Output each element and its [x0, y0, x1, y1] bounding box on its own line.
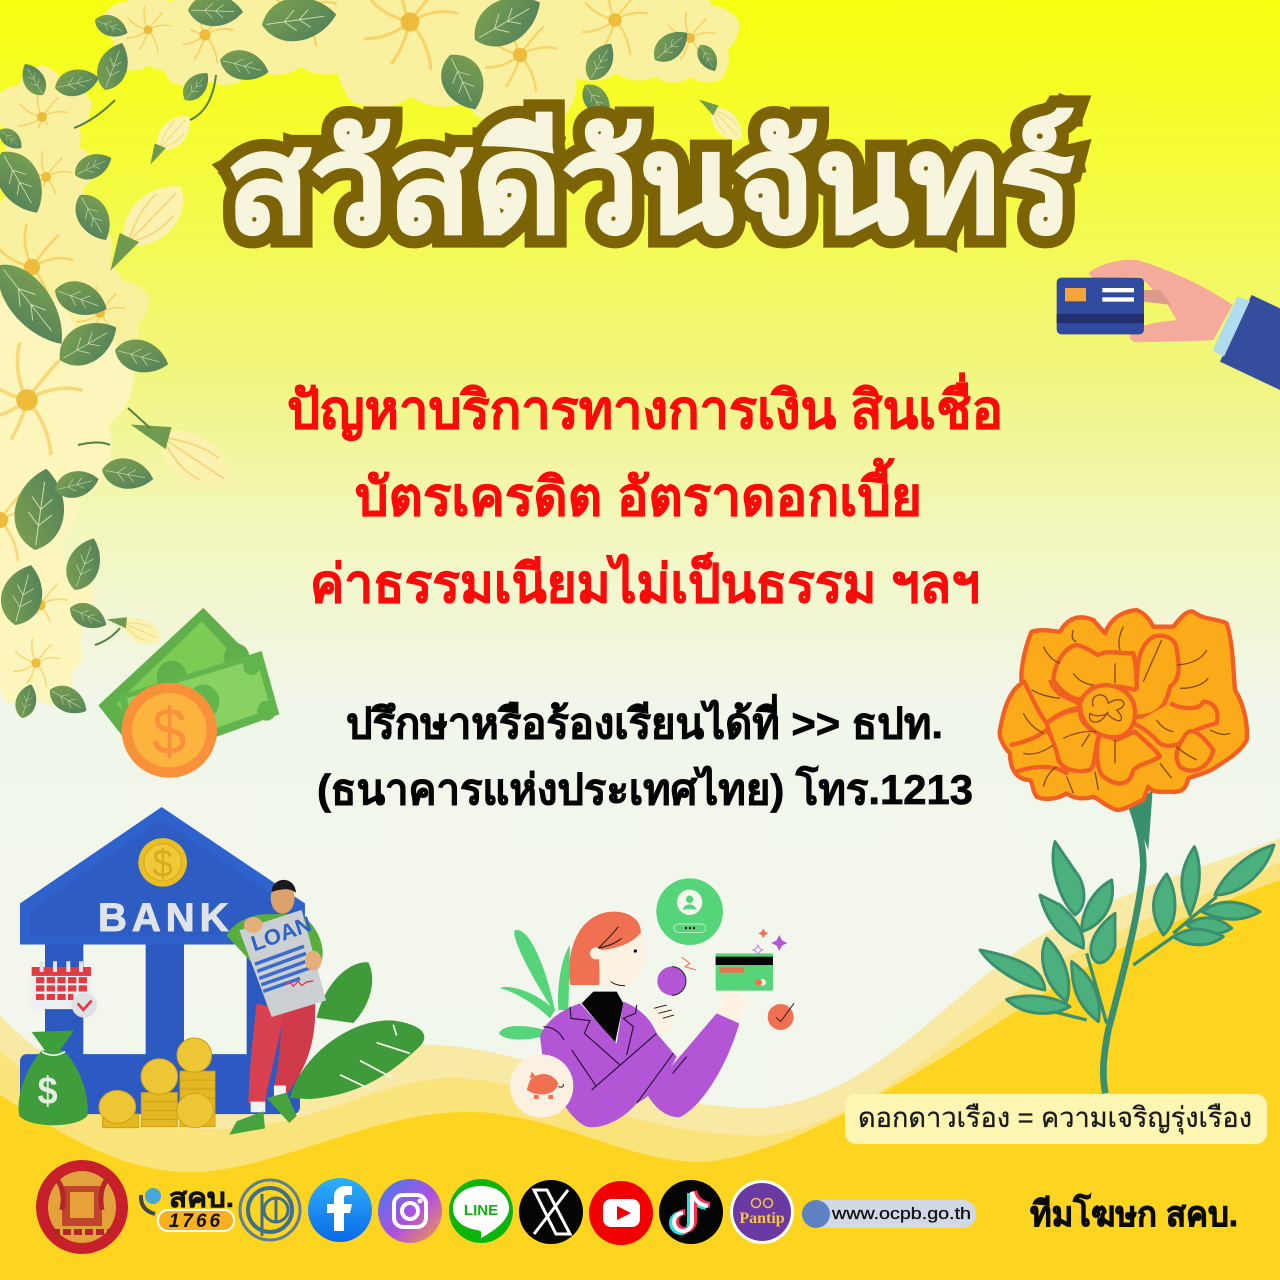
- website pill: www.ocpb.go.th: [831, 1204, 971, 1223]
- calendar: [32, 961, 97, 1018]
- icon: hand holding credit card: [1057, 260, 1280, 390]
- stem and leaves: [980, 790, 1274, 1093]
- icon: facebook: [308, 1178, 372, 1242]
- icon: Pantip: Pantip: [739, 1210, 785, 1227]
- illustration: bank with loan character: [19, 807, 424, 1135]
- coin stacks: [99, 1038, 215, 1128]
- icon: LINE: [449, 1179, 513, 1243]
- bank building: $: [152, 843, 173, 886]
- illustration: woman with credit card: [499, 878, 794, 1127]
- hotline logo: สคบ.: [169, 1183, 234, 1213]
- title: สวัสดีวันจันทร์: [226, 108, 1074, 262]
- icon: banknotes and coin: [98, 608, 279, 778]
- bank label: BANK: [98, 896, 234, 940]
- palm leaves: [290, 962, 424, 1099]
- website pill: [802, 1200, 976, 1228]
- icon: banknotes and coin: $: [152, 694, 186, 769]
- icon: Pantip: [730, 1180, 794, 1244]
- red headline text: [287, 372, 1003, 614]
- team credit: ทีมโฆษก สคบ.: [1030, 1193, 1238, 1234]
- callout: marigold meaning: [845, 1094, 1267, 1144]
- icon: YouTube: [589, 1181, 653, 1245]
- callout: marigold meaning: ดอกดาวเรือง = ความเจริญรุ่งเรือง: [858, 1102, 1252, 1135]
- black contact text: [317, 694, 973, 813]
- red headline text: ปัญหาบริการทางการเงิน สินเชื่อ: [287, 372, 1003, 441]
- footer logo row: [36, 1160, 976, 1254]
- red headline text: บัตรเครดิต อัตราดอกเบี้ย: [355, 458, 922, 527]
- character holding loan sheet: LOAN: [248, 911, 314, 956]
- bank building: [20, 807, 305, 1114]
- hotline logo: 1766: [169, 1211, 223, 1232]
- money bag: $: [38, 1069, 58, 1112]
- illustration: marigold flower: [980, 610, 1274, 1093]
- red headline text: ค่าธรรมเนียมไม่เป็นธรรม ฯลฯ: [310, 552, 980, 614]
- icon: X: [519, 1180, 583, 1244]
- seal logo: [36, 1160, 128, 1254]
- black contact text: ปรึกษาหรือร้องเรียนได้ที่ >> ธปท.: [346, 694, 943, 747]
- character holding loan sheet: [227, 880, 326, 1135]
- CPC round logo: [240, 1180, 300, 1240]
- icon: TikTok: [659, 1180, 723, 1244]
- icon: instagram: [378, 1179, 442, 1243]
- money bag: [19, 1031, 88, 1125]
- flower head: [1000, 610, 1247, 810]
- icon: LINE: LINE: [464, 1202, 498, 1219]
- hotline logo: [141, 1183, 234, 1232]
- black contact text: (ธนาคารแห่งประเทศไทย) โทร.1213: [317, 765, 973, 813]
- flower garland: top and left: [0, 0, 748, 721]
- title: สวัสดีวันจันทร์: [226, 108, 1074, 262]
- background wave layers: [0, 838, 1280, 1280]
